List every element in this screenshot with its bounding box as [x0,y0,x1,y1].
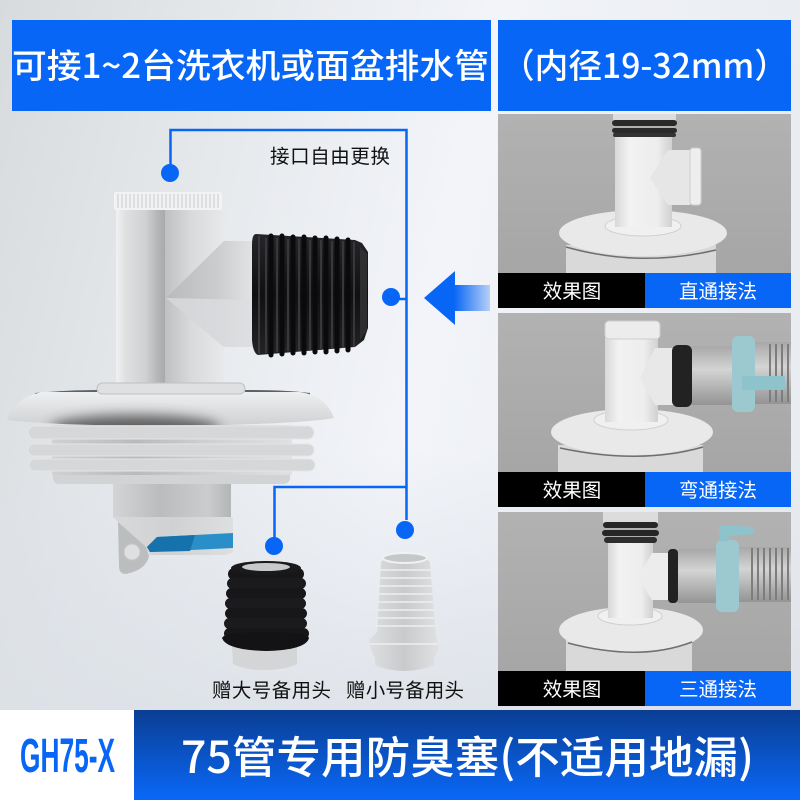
panel: tee connection [498,510,791,706]
caption: tee connection: 三通接法 [679,679,757,701]
lower tube with blue seal and flap [113,484,233,574]
top knurled cap [114,192,222,210]
caption: effect photo [498,472,645,507]
caption: straight connection: 直通接法 [679,281,757,303]
sealing rings [28,425,315,484]
photo: elbow connection [498,313,791,475]
heading: inner diameter: （内径19-32mm） [501,39,788,88]
caption: effect photo: 效果图 [543,480,601,502]
large spare head (black) [222,561,309,670]
heading: connection capability: 可接1~2台洗衣机或面盆排水管 [12,39,489,88]
small spare head (white) [369,553,439,671]
caption: effect photo [498,671,645,706]
caption: effect photo: 效果图 [543,679,601,701]
label: small spare head gift: 赠小号备用头 [346,680,464,702]
caption: tee connection [645,671,791,706]
black threaded connector [252,234,368,355]
model number box [0,710,134,800]
heading: connection capability [12,20,491,111]
callout lines and dots [161,130,414,555]
panel: straight connection [498,112,791,308]
caption: effect photo [498,273,645,308]
flange cover [7,382,334,425]
caption: straight connection [645,273,791,308]
product name banner: 75管专用防臭塞(不适用地漏) [181,722,754,786]
arrow pointing left [424,271,490,325]
caption: elbow connection: 弯通接法 [679,480,757,502]
heading: inner diameter [498,20,791,111]
panel: elbow connection [498,313,791,507]
model number box: GH75-X [20,730,115,783]
product name banner [134,710,800,800]
photo: straight connection [498,112,791,275]
label: interchangeable connector: 接口自由更换 [270,146,390,168]
photo: tee connection [498,510,791,673]
label: large spare head gift: 赠大号备用头 [212,680,331,702]
main product: odor-proof plug [7,192,368,574]
tee body [116,210,253,385]
caption: effect photo: 效果图 [543,281,601,303]
caption: elbow connection [645,472,791,507]
